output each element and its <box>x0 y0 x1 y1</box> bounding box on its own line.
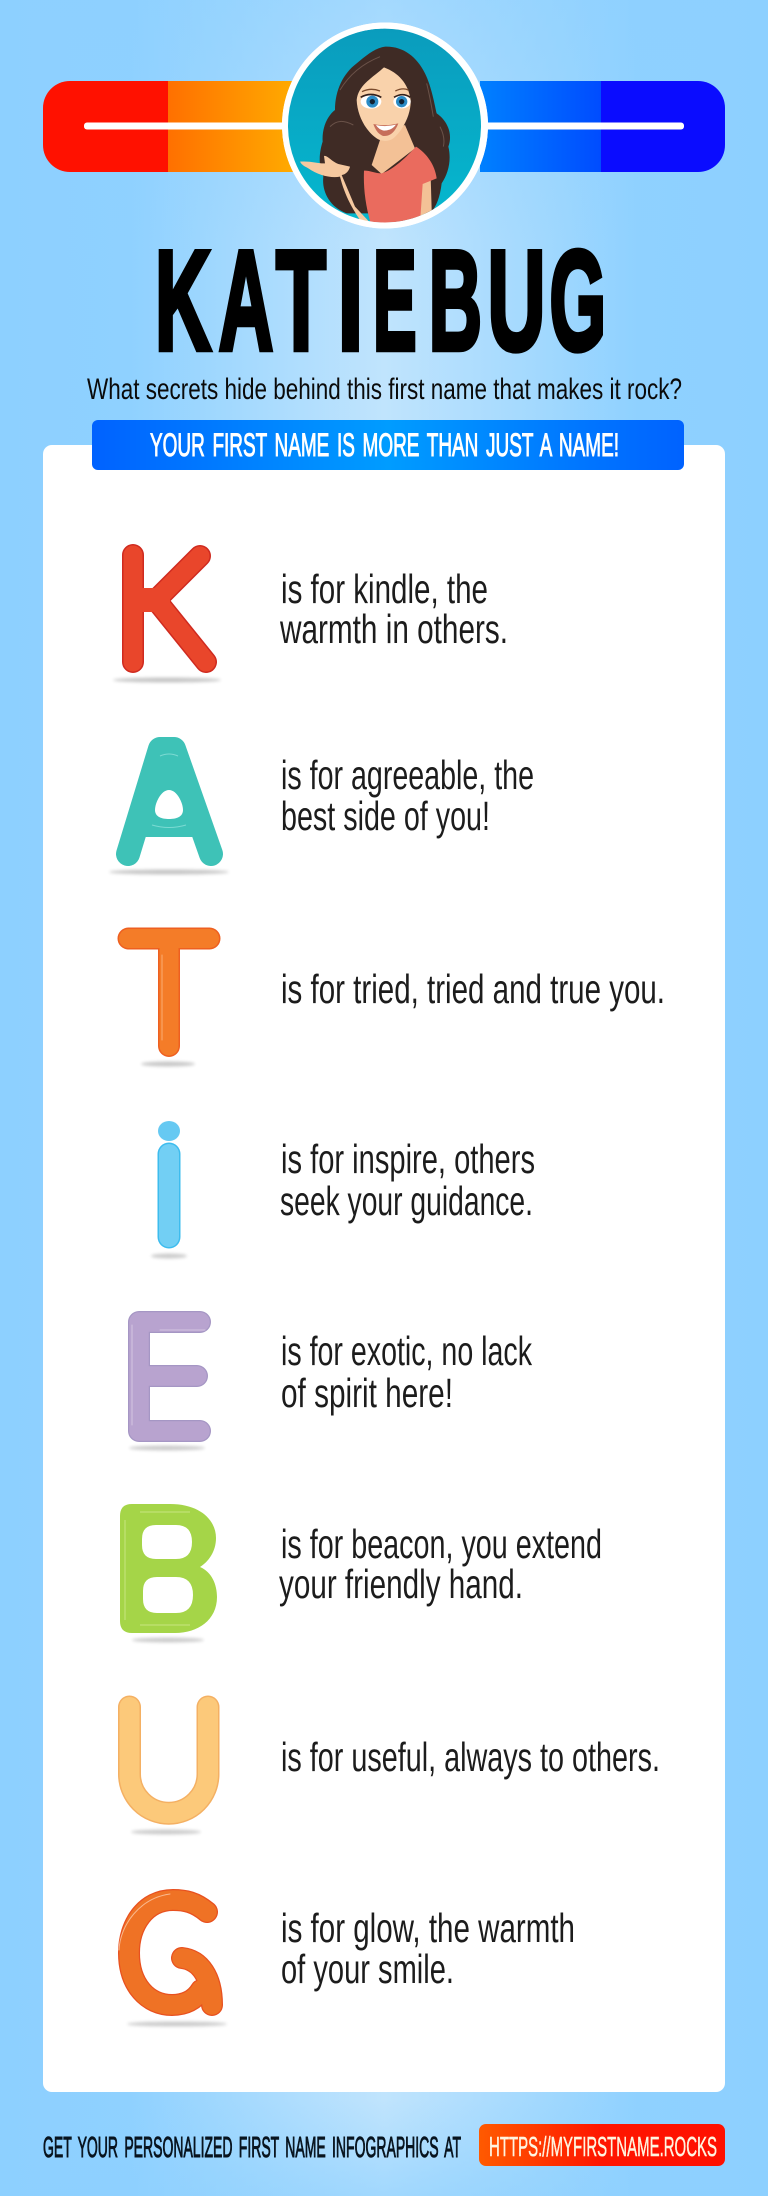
icon: letter i <box>151 1121 187 1258</box>
icon: letter U <box>130 1707 208 1834</box>
text: I <box>280 1136 535 1224</box>
row: letter U <box>130 1707 660 1834</box>
row: letter A <box>109 749 534 874</box>
avatar portrait <box>282 22 488 228</box>
title: T <box>276 222 326 380</box>
text: A: is for agreeable, the <box>281 752 534 798</box>
row: letter B <box>120 1504 602 1642</box>
white content panel <box>43 445 725 2092</box>
icon: letter K <box>113 555 221 682</box>
left arm and hand <box>300 156 371 223</box>
eyes <box>361 89 411 109</box>
row: letter K <box>113 555 508 682</box>
hair highlights <box>330 57 444 147</box>
row: letter T <box>128 938 665 1066</box>
icon: letter G <box>119 1894 227 2026</box>
text: K: is for kindle, the <box>281 566 488 612</box>
text: K <box>279 566 508 652</box>
footer URL button <box>479 2124 725 2166</box>
neck <box>372 125 415 174</box>
title <box>155 222 606 380</box>
text: B: your friendly hand. <box>279 1561 523 1607</box>
text: A: best side of you! <box>281 793 490 839</box>
title: A <box>219 222 273 380</box>
shirt <box>364 147 437 223</box>
text: E <box>281 1328 532 1416</box>
icon: letter E <box>129 1322 205 1450</box>
title: I <box>338 222 363 380</box>
mouth <box>373 123 398 136</box>
title: B <box>429 222 482 380</box>
text: I: is for inspire, others <box>281 1136 535 1182</box>
title: E <box>373 222 417 380</box>
icon: letter A <box>109 749 229 874</box>
text: E: is for exotic, no lack <box>281 1328 532 1374</box>
text: B <box>279 1521 602 1607</box>
text: G: is for glow, the warmth <box>281 1905 575 1951</box>
title: G <box>550 222 606 380</box>
header colour bar <box>43 81 725 172</box>
row: letter I <box>151 1121 535 1258</box>
text: G: of your smile. <box>281 1946 454 1992</box>
title: K <box>155 222 211 380</box>
text: K: warmth in others. <box>279 606 508 652</box>
text: E: of spirit here! <box>281 1370 453 1416</box>
row: letter G <box>119 1894 575 2026</box>
right arm <box>414 180 432 218</box>
text: B: is for beacon, you extend <box>281 1521 602 1567</box>
hair <box>320 47 450 213</box>
text: A <box>281 752 534 839</box>
text: G <box>281 1905 575 1992</box>
banner <box>92 420 684 470</box>
title: U <box>488 222 546 380</box>
icon: letter T <box>128 938 210 1066</box>
text: I: seek your guidance. <box>280 1178 533 1224</box>
row: letter E <box>129 1322 532 1450</box>
icon: letter B <box>120 1504 217 1642</box>
face <box>357 67 411 141</box>
